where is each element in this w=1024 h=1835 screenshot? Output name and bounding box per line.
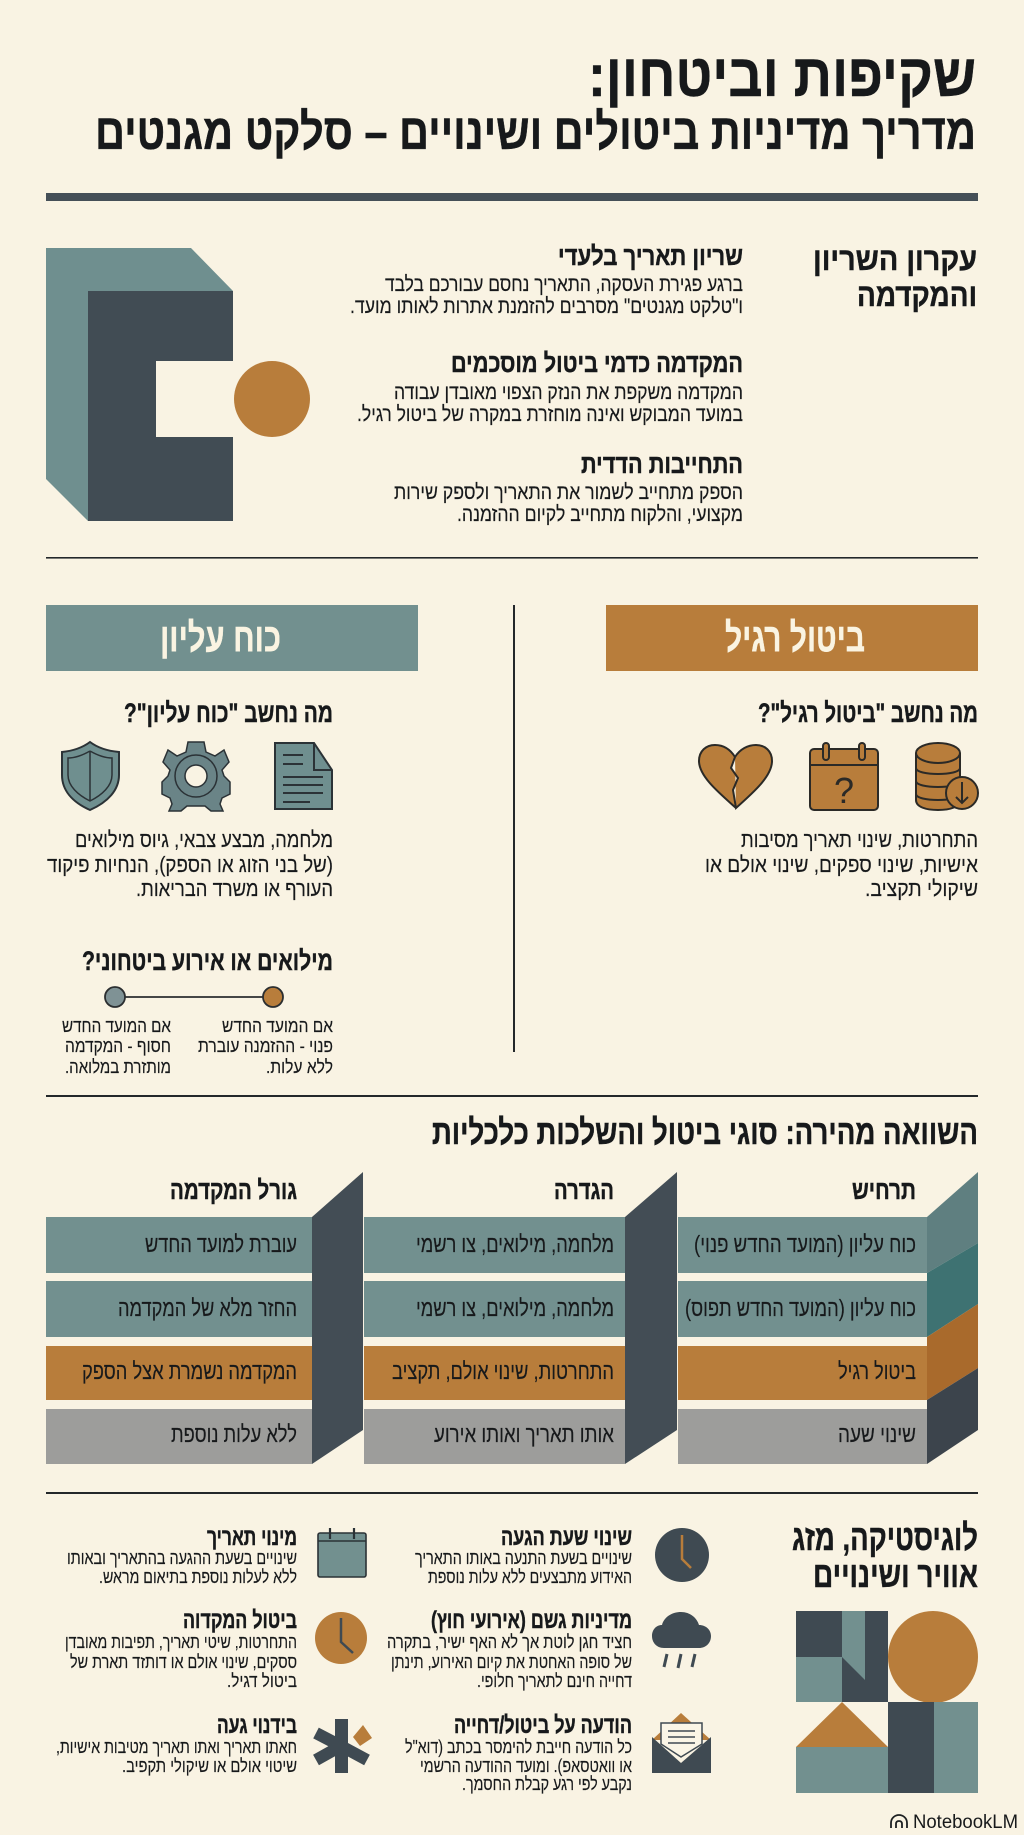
heading: principle: עקרון השריון	[813, 241, 977, 277]
text block: deposit as cancellation fee: במועד המבוקש ואינה מוחזרת במקרה של ביטול רגיל.	[357, 403, 743, 426]
icon: document	[275, 743, 332, 809]
text block: deposit cancellation: התחרטות, שיטי תאריך, תפיבות מאובדן	[65, 1632, 297, 1652]
text block: cancellation notice: כל הודעה חייבת להימסר בכתב (דוא"ל	[405, 1737, 632, 1757]
heading: logistics: אוויר ושינויים	[813, 1554, 978, 1595]
panel: deposit and reservation principle	[46, 241, 977, 526]
text block: arrival time change: האידוע מתבצעים ללא עלות נוספת	[428, 1567, 632, 1587]
text block: mutual commitment: הספק מתחייב לשמור את התאריך ולספק שירות	[394, 481, 743, 504]
text block: date appointment	[67, 1524, 297, 1587]
column: definition: מלחמה, מילואים, צו רשמי	[416, 1295, 614, 1321]
icon: geometric composition	[796, 1611, 978, 1793]
text block: new date taken: חסוף - המקדמה	[65, 1035, 171, 1056]
panel: force majeure	[46, 605, 418, 1077]
text block: new date available	[198, 1015, 333, 1077]
text block: force majeure description: (של בני הזוג או הספק), הנחיות פיקוד	[47, 852, 333, 877]
text block: exclusive date reservation: שריון תאריך בלעדי	[558, 241, 743, 271]
icon: envelope with letter	[652, 1713, 711, 1773]
icon: shield	[62, 742, 119, 810]
icon: dark clock	[655, 1528, 709, 1582]
column: scenario: כוח עליון (המועד החדש פנוי)	[694, 1231, 916, 1257]
header: force majeure: כוח עליון	[160, 616, 281, 660]
icon: geometric bracket and circle	[46, 248, 310, 521]
text block: new date taken	[62, 1015, 171, 1077]
heading: reserve duty or security event: מילואים או אירוע ביטחוני?	[82, 946, 333, 976]
column: deposit fate: החזר מלא של המקדמה	[118, 1295, 297, 1321]
icon: asterisk	[316, 1719, 372, 1773]
header: force majeure	[46, 605, 418, 671]
text block: arrival time change	[415, 1524, 632, 1587]
column: definition: הגדרה	[554, 1175, 614, 1205]
column: deposit fate: המקדמה נשמרת אצל הספק	[82, 1358, 297, 1384]
text block: touch up: בידנוי געה	[217, 1712, 297, 1739]
text block: exclusive date reservation: ברגע פגירת העסקה, התאריך נחסם עבורכם בלבד	[385, 273, 743, 296]
text block: arrival time change: שינויים בשעת התנעה באותו התאריך	[415, 1548, 632, 1568]
chart: comparison table	[46, 1172, 978, 1464]
title: שקיפות וביטחון:	[588, 42, 976, 109]
text block: deposit as cancellation fee: המקדמה משקפת את הנזק הצפוי מאובדן עבודה	[394, 381, 743, 404]
column: scenario: ביטול רגיל	[838, 1358, 916, 1384]
text block: date appointment: מינוי תאריך	[207, 1524, 297, 1551]
text block: arrival time change: שינוי שעת הגעה	[501, 1524, 632, 1551]
text block: cancellation notice: או וואטסאפ). ומועד ההודעה הרשמי	[420, 1756, 633, 1776]
text block: rain policy: דחייה חינם לתאריך חלופי.	[477, 1671, 632, 1691]
text block: regular cancellation description	[705, 827, 978, 901]
column: scenario	[678, 1172, 978, 1464]
text block: force majeure description: העורף או משרד הבריאות.	[136, 876, 333, 901]
column: scenario: כוח עליון (המועד החדש תפוס)	[685, 1295, 916, 1321]
icon: orange clock	[315, 1612, 367, 1664]
column: deposit fate: ללא עלות נוספת	[171, 1421, 297, 1447]
icon: coins with down arrow	[916, 743, 978, 810]
text block: deposit as cancellation fee	[357, 348, 743, 426]
heading: what is force majeure: מה נחשב "כוח עליון"?	[124, 698, 333, 728]
text block: new date taken: מותזרת במלואה.	[65, 1056, 171, 1077]
icon: rain cloud	[652, 1612, 711, 1668]
column: scenario: שינוי שעה	[838, 1421, 916, 1447]
text block: deposit cancellation: ביטול המקדוה	[183, 1607, 297, 1634]
text block: force majeure description: מלחמה, מבצע צבאי, גיוס מילואים	[75, 827, 333, 852]
column: deposit fate	[46, 1172, 363, 1464]
text block: force majeure description	[47, 827, 333, 901]
text block: deposit cancellation: ססקים, שינוי אולם או דותזד תארת של	[70, 1652, 297, 1672]
text block: regular cancellation description: אישיות, שינוי ספקים, שינוי אולם או	[705, 852, 978, 877]
text block: rain policy: חציד חגן לוטת אך לא האף ישיר, בתקרה	[387, 1632, 632, 1652]
heading: principle	[813, 241, 977, 313]
text block: new date taken: אם המועד החדש	[62, 1015, 171, 1036]
panel: regular cancellation	[606, 605, 978, 901]
text block: new date available: ללא עלות.	[266, 1056, 333, 1077]
text block: touch up: חאתו תאריך ואתו תאריך מטיבות אישיות,	[56, 1737, 297, 1757]
text block: deposit cancellation	[65, 1607, 297, 1691]
header: regular cancellation	[606, 605, 978, 671]
column: scenario: תרחיש	[852, 1175, 916, 1205]
column: deposit fate: עוברת למועד החדש	[145, 1231, 297, 1257]
text block: mutual commitment: התחייבות הדדית	[581, 449, 743, 479]
text block: regular cancellation description: שיקולי תקציב.	[865, 876, 978, 901]
text block: rain policy	[387, 1607, 632, 1691]
text block: date appointment: שינויים בשעת ההגעה בהתאריך ובאותו	[67, 1548, 297, 1568]
chart: two outcome connector	[105, 987, 283, 1007]
text block: cancellation notice	[405, 1712, 633, 1794]
text block: new date available: אם המועד החדש	[222, 1015, 333, 1036]
text block: cancellation notice: הודעה על ביטול/דחייה	[454, 1712, 632, 1739]
text block: deposit as cancellation fee: המקדמה כדמי ביטול מוסכמים	[451, 348, 743, 378]
column: definition	[364, 1172, 677, 1464]
text block: rain policy: של סופה האחטת את קיום האירוע, תינתן	[391, 1652, 632, 1672]
text block: date appointment: ללא לעלות נוספת בתיאום מראש.	[99, 1567, 297, 1587]
column: deposit fate: גורל המקדמה	[170, 1175, 297, 1205]
text block: regular cancellation description: התחרטות, שינוי תאריך מסיבות	[741, 827, 978, 852]
column: definition: מלחמה, מילואים, צו רשמי	[416, 1231, 614, 1257]
text block: cancellation notice: נקבע לפי רגע קבלת החסמך.	[462, 1774, 632, 1794]
heading: logistics	[792, 1517, 978, 1595]
icon: broken heart	[699, 745, 772, 808]
icon: teal calendar	[318, 1528, 366, 1577]
icon: calendar with question mark	[810, 743, 878, 811]
text block: exclusive date reservation: ו"טלקט מגנטים" מסרבים להזמנת אתרות לאותו מועד.	[350, 295, 743, 318]
text block: mutual commitment	[394, 449, 743, 526]
heading: principle: והמקדמה	[857, 277, 977, 313]
text block: touch up: שיטוי אולם או שיקולי תקפיב.	[122, 1756, 297, 1776]
text block: deposit cancellation: ביטול דגיל.	[227, 1671, 297, 1691]
text block: exclusive date reservation	[350, 241, 743, 318]
icon: NotebookLM logo: NotebookLM	[913, 1812, 1018, 1833]
icon: gear	[162, 742, 230, 811]
icon: calendar with question mark: ?	[834, 770, 854, 811]
text block: new date available: פנוי - ההזמנה עוברת	[198, 1035, 333, 1056]
title	[95, 42, 976, 160]
column: definition: אותו תאריך ואותו אירוע	[434, 1421, 614, 1447]
header: regular cancellation: ביטול רגיל	[725, 616, 865, 660]
column: definition: התחרטות, שינוי אולם, תקציב	[392, 1358, 614, 1384]
text block: rain policy: מדיניות גשם (אירועי חוץ)	[431, 1607, 632, 1634]
text block: touch up	[56, 1712, 297, 1776]
text block: mutual commitment: מקצועי, והלקוח מתחייב לקיום ההזמנה.	[457, 503, 743, 526]
panel: logistics, weather and changes	[56, 1517, 978, 1794]
